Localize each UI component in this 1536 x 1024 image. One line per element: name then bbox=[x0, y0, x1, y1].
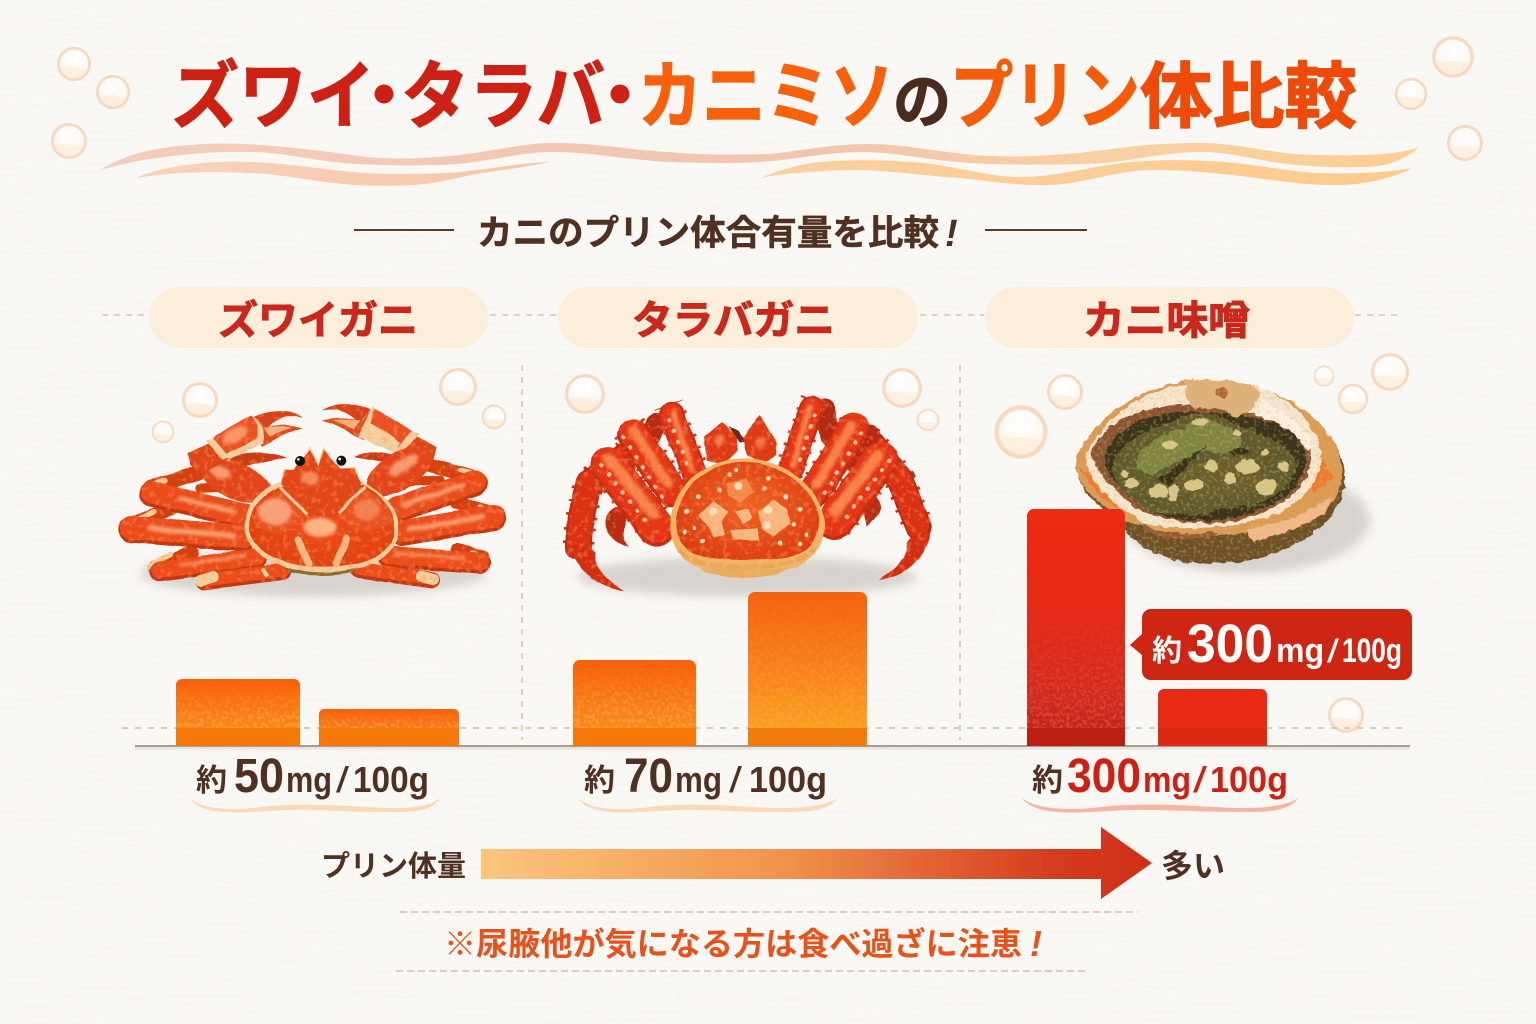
value label: snow crab: 100g bbox=[353, 759, 429, 800]
title wave decoration bbox=[100, 143, 1419, 186]
carapace bbox=[670, 458, 825, 573]
header pill: タラバガニ bbox=[558, 287, 918, 348]
small front claws bbox=[728, 427, 747, 442]
callout: 約300mg/100g: 100g bbox=[1342, 632, 1402, 670]
value label: king crab: 100g bbox=[749, 759, 827, 800]
header pill: タラバガニ: タラバガニ bbox=[632, 288, 835, 346]
footnote with dashed rules: ! bbox=[1030, 923, 1042, 964]
subheading with side rules: ! bbox=[945, 213, 958, 255]
header pill: カニ味噌: カニ味噌 bbox=[1083, 288, 1250, 346]
header pill: ズワイガニ bbox=[149, 287, 488, 348]
small inner spikes bbox=[227, 453, 287, 468]
value label: snow crab: 約 bbox=[196, 755, 227, 800]
callout: 約300mg/100g: 300 bbox=[1187, 614, 1273, 674]
carapace bbox=[245, 446, 399, 573]
header pill: カニ味噌 bbox=[985, 287, 1354, 348]
value label: snow crab: 50 bbox=[234, 750, 284, 803]
bar: snow crab right bbox=[319, 709, 459, 746]
decorative bubbles, title area bbox=[52, 38, 1482, 160]
column dividers and header dashes bbox=[102, 315, 1402, 740]
value label: kani miso: 約 bbox=[1032, 755, 1063, 800]
right claw bbox=[322, 404, 437, 467]
value label: kani miso: mg bbox=[1143, 759, 1191, 800]
value label: kani miso: 300 bbox=[1067, 750, 1141, 803]
value label: king crab: / bbox=[729, 759, 742, 800]
subheading with side rules: カニのプリン体合有量を比較 bbox=[477, 205, 939, 256]
bubbles, snow crab bbox=[153, 370, 505, 442]
value label: king crab: 70 bbox=[624, 750, 673, 803]
callout: 約300mg/100g: / bbox=[1327, 633, 1339, 669]
callout: 約300mg/100g: mg bbox=[1276, 632, 1324, 670]
bubbles, king crab bbox=[567, 370, 938, 430]
value label: snow crab: mg bbox=[286, 759, 332, 800]
title: カニミソ bbox=[638, 37, 894, 144]
miso mounds bbox=[1112, 413, 1297, 514]
title: ズワイ bbox=[171, 37, 375, 144]
header pill: ズワイガニ: ズワイガニ bbox=[218, 288, 418, 346]
title: ・ bbox=[583, 37, 657, 144]
left claw bbox=[187, 411, 303, 512]
value label: king crab: 約 bbox=[584, 755, 615, 800]
title: ・ bbox=[347, 37, 421, 144]
chart: dashed reference line bbox=[122, 727, 1405, 729]
back leg segments bbox=[130, 464, 497, 567]
arrow label: 多い: 多い bbox=[1161, 841, 1225, 887]
bar: kani miso right bbox=[1158, 689, 1267, 746]
front legs bbox=[132, 483, 493, 582]
chart: baseline bbox=[135, 746, 1410, 748]
value label: king crab bbox=[578, 750, 838, 813]
title: タラバ bbox=[401, 37, 605, 144]
value label: king crab: mg bbox=[675, 759, 722, 800]
value label: kani miso bbox=[1022, 750, 1298, 813]
callout: 約300mg/100g: 約 bbox=[1152, 626, 1182, 670]
title bbox=[171, 37, 1357, 144]
title: の bbox=[893, 54, 951, 141]
value label: snow crab bbox=[190, 750, 441, 813]
bar: snow crab left bbox=[176, 679, 300, 746]
footnote with dashed rules bbox=[396, 912, 1138, 971]
arrow label: プリン体量: プリン体量 bbox=[321, 843, 466, 885]
value label: kani miso: / bbox=[1193, 759, 1207, 800]
bar: king crab left bbox=[573, 660, 696, 746]
outer bent legs bbox=[578, 408, 918, 547]
bar: king crab right bbox=[748, 592, 867, 746]
eyes bbox=[295, 456, 346, 466]
title: プリン bbox=[950, 37, 1140, 144]
illustration: kani miso in shell bbox=[1076, 379, 1370, 573]
footnote with dashed rules: ※尿腋他が気になる方は食べ過ざに注恵 bbox=[444, 919, 1022, 965]
illustration: king crab bbox=[568, 400, 930, 597]
bubbles, kani miso bbox=[997, 355, 1407, 732]
bar: kani miso left bbox=[1027, 509, 1125, 746]
value label: kani miso: 100g bbox=[1210, 759, 1288, 800]
callout: 約300mg/100g bbox=[1130, 609, 1412, 680]
illustration: snow crab bbox=[125, 404, 500, 597]
main spiky legs bbox=[598, 400, 890, 530]
title: 体比較 bbox=[1140, 38, 1357, 143]
value label: snow crab: / bbox=[336, 759, 349, 800]
subheading with side rules bbox=[354, 205, 1087, 256]
arrow: purine amount scale bbox=[481, 827, 1152, 899]
